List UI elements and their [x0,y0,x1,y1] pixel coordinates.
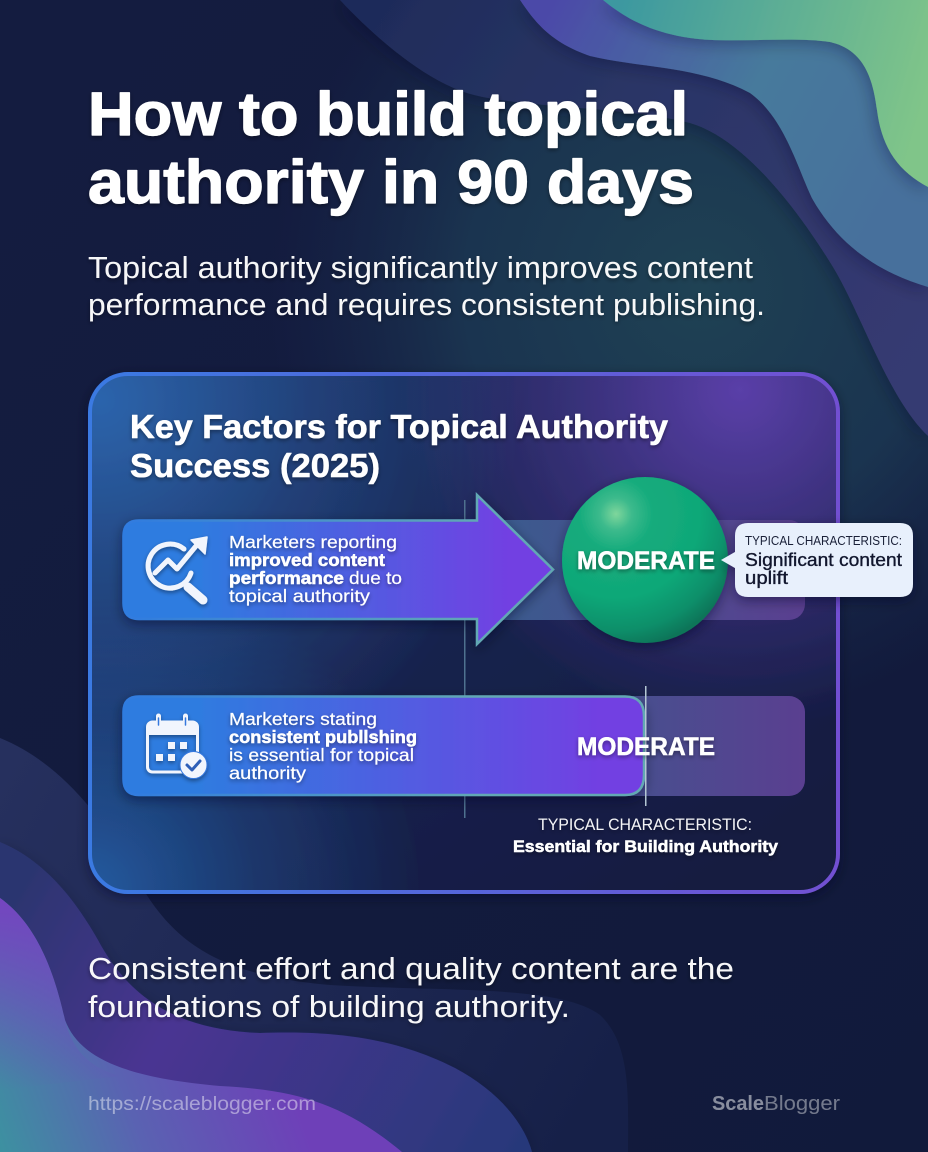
row 2: bar [124,696,644,795]
footer brand: Scale [712,1093,764,1115]
footer brand [712,1093,840,1115]
callout: row 1 characteristic: Significant content [745,550,902,570]
footer brand: Blogger [764,1093,840,1115]
row 2 value label: MODERATE [577,733,715,761]
row 2 text [229,709,417,783]
footer url: https://scaleblogger.com [88,1093,316,1115]
row 2 characteristic: TYPICAL CHARACTERISTIC: [538,815,752,834]
panel: key factors [90,374,913,892]
panel heading: Success (2025) [130,448,380,485]
background waves: top right [340,0,928,436]
panel background [90,374,838,892]
callout: row 1 characteristic [721,523,913,597]
row 1: arrow bar [124,495,553,644]
title: authority in 90 days [88,148,694,216]
tracks and reference lines [123,500,805,818]
callout: row 1 characteristic: TYPICAL CHARACTERISTIC: [745,533,902,548]
row 1 value label: MODERATE [577,547,715,575]
row 1 text: Marketers reporting [229,532,397,552]
row 2 text: Marketers stating [229,709,377,729]
closing statement: Consistent effort and quality content are the [88,951,734,986]
callout: row 1 characteristic: uplift [745,568,788,588]
icon: chart with magnifier [148,537,207,600]
closing statement: foundations of building authority. [88,989,570,1024]
row 2 text: consistent publlshing [229,727,417,747]
row 1 text: topical authority [229,586,370,606]
row 2 characteristic: Essential for Building Authority [513,837,779,856]
panel heading [130,409,668,485]
row 1 text: due to [349,568,402,588]
row 2 text: authority [229,763,306,783]
row 1 text: improved content [229,550,385,570]
title [88,80,694,216]
row 1 text: performance [229,568,344,588]
row 2 text: is essential for topical [229,745,414,765]
subtitle: performance and requires consistent publishing. [88,287,765,322]
row 2 reference line [645,686,646,806]
background waves: bottom left [0,738,628,1152]
subtitle [88,250,765,322]
title: How to build topical [88,80,688,148]
panel heading: Key Factors for Topical Authority [130,409,668,446]
icon: calendar with check [147,716,207,778]
row 1 text [229,532,402,606]
closing statement [88,951,734,1024]
subtitle: Topical authority significantly improves content [88,250,753,285]
row 2 characteristic [513,815,779,856]
row 1 value: green sphere [562,477,728,643]
